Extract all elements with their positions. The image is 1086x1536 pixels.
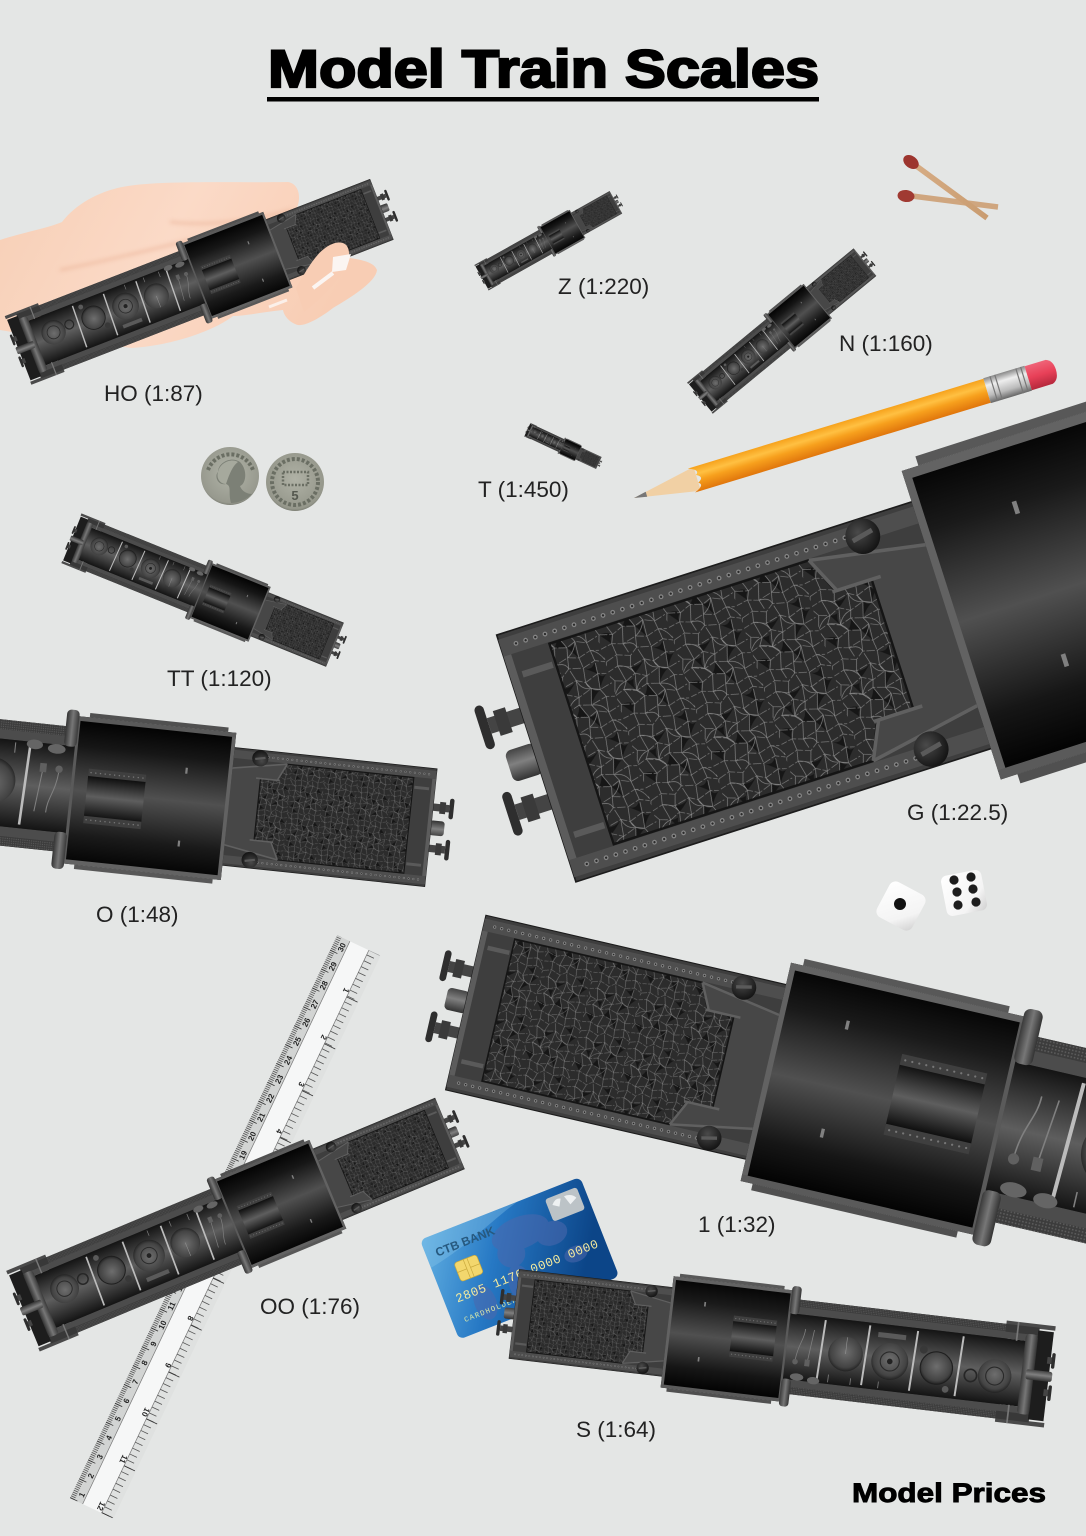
credit card: CTB BANK — [433, 1223, 497, 1260]
ruler: 27 — [309, 998, 321, 1010]
ruler: 10 — [157, 1319, 169, 1331]
ruler: 18 — [228, 1168, 240, 1180]
train: 1 — [408, 878, 1086, 1365]
ruler: 28 — [318, 979, 330, 991]
ruler: 14 — [193, 1243, 205, 1255]
pencil — [630, 357, 1060, 510]
ruler: 4 — [274, 1127, 284, 1136]
label S: S (1:64) — [576, 1417, 656, 1442]
ruler: 8 — [140, 1359, 150, 1367]
train: O — [0, 673, 460, 909]
ruler: 20 — [246, 1130, 259, 1142]
ruler: 5 — [113, 1415, 123, 1423]
label HO: HO (1:87) — [104, 381, 203, 406]
ruler: 25 — [291, 1035, 304, 1047]
train: T — [523, 421, 605, 472]
fingers over HO model — [269, 242, 351, 312]
ruler: 9 — [163, 1361, 173, 1370]
ruler: 12 — [95, 1500, 107, 1513]
ruler: 5 — [251, 1174, 262, 1183]
ruler: 21 — [255, 1111, 268, 1123]
label Z: Z (1:220) — [558, 274, 649, 299]
ruler: 6 — [122, 1396, 132, 1405]
ruler: 15 — [202, 1224, 214, 1236]
ruler: 4 — [104, 1434, 114, 1442]
label T: T (1:450) — [478, 477, 569, 502]
ruler: 11 — [166, 1300, 178, 1312]
ruler: 10 — [139, 1406, 152, 1419]
label N: N (1:160) — [839, 331, 933, 356]
ruler: 29 — [327, 960, 339, 972]
ruler: 17 — [219, 1187, 231, 1199]
train: TT — [58, 508, 354, 677]
ruler: 24 — [282, 1054, 295, 1066]
credit card — [420, 1177, 619, 1340]
title: Model Train Scales — [268, 40, 819, 99]
ruler: 12 — [175, 1281, 187, 1293]
ruler: 3 — [95, 1452, 105, 1461]
ruler: 2 — [86, 1471, 96, 1480]
ruler: 22 — [264, 1092, 277, 1104]
ruler: 13 — [184, 1262, 196, 1274]
ruler: 7 — [131, 1377, 141, 1386]
ruler: 9 — [149, 1340, 159, 1348]
ruler: 1 — [77, 1490, 87, 1499]
train: Z — [472, 185, 628, 293]
ruler: 23 — [273, 1073, 286, 1085]
coins — [201, 447, 324, 511]
ruler: 6 — [229, 1221, 239, 1230]
footer brand: Model Prices — [852, 1478, 1046, 1508]
ruler: 1 — [341, 986, 351, 995]
train: S — [492, 1252, 1060, 1437]
label 1: 1 (1:32) — [698, 1212, 776, 1237]
ruler: 30 — [336, 941, 348, 953]
matches — [897, 152, 998, 218]
train: N — [684, 240, 885, 418]
ruler: 11 — [117, 1453, 129, 1465]
dice — [874, 869, 988, 933]
ruler: 3 — [296, 1080, 306, 1089]
train: OO — [0, 1081, 482, 1360]
ruler — [70, 935, 381, 1519]
label G: G (1:22.5) — [907, 800, 1008, 825]
ruler: 2 — [318, 1033, 329, 1042]
ruler: 7 — [207, 1267, 218, 1276]
coins: 5 — [291, 488, 299, 503]
hand holding HO model — [0, 182, 377, 348]
credit card: CARDHOLDER — [463, 1297, 519, 1325]
ruler: 8 — [185, 1314, 195, 1323]
ruler: 16 — [211, 1205, 223, 1217]
label O: O (1:48) — [96, 902, 179, 927]
ruler: 19 — [237, 1149, 250, 1161]
train: HO — [0, 165, 408, 392]
label TT: TT (1:120) — [167, 666, 272, 691]
train: G — [441, 122, 1086, 939]
ruler: 26 — [300, 1016, 313, 1028]
label OO: OO (1:76) — [260, 1294, 360, 1319]
credit card: 2805 1176 0000 0000 — [454, 1238, 600, 1306]
